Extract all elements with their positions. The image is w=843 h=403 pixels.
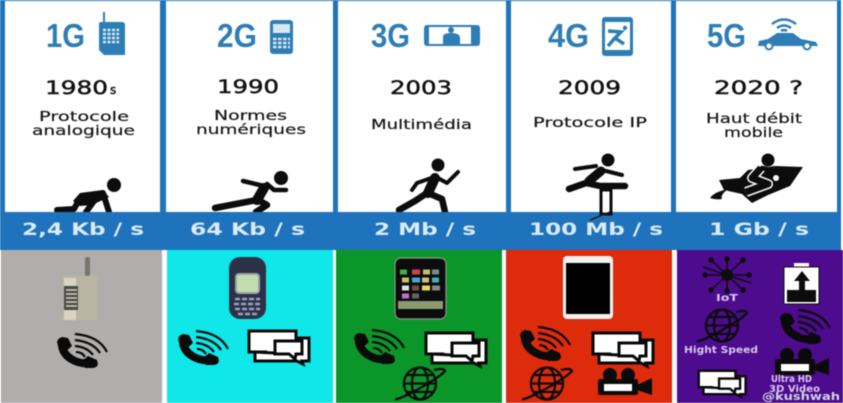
panel: 5G features bbox=[677, 250, 843, 403]
icon: voice call bbox=[354, 330, 404, 364]
panel: 2G features bbox=[167, 250, 333, 403]
text: Haut débit mobile: Haut débit bbox=[706, 111, 802, 127]
year: 2003: 2003 bbox=[390, 77, 452, 99]
text: Ultra HD 3D Video bbox=[769, 374, 820, 395]
heading: 5G: 5G bbox=[707, 17, 746, 54]
text: Hight Speed: Hight Speed bbox=[684, 345, 758, 356]
panel: 3G generation bbox=[338, 1, 506, 212]
panel: 4G generation bbox=[511, 1, 671, 212]
text: Multimédia: Multimédia bbox=[371, 117, 472, 133]
panel: 1G generation bbox=[5, 1, 160, 212]
icon: rider on rocket bbox=[710, 154, 803, 203]
speed band bbox=[0, 212, 841, 249]
text: Ultra HD 3D Video: Ultra HD bbox=[771, 374, 812, 385]
icon: 2G phone bbox=[270, 20, 293, 54]
speed: 1 Gb/s: 1 Gb / s bbox=[709, 220, 809, 239]
icon: text messages bbox=[593, 333, 653, 366]
text: Normes numériques: numériques bbox=[196, 122, 306, 138]
icon: connected car bbox=[758, 20, 818, 50]
icon: text messages bbox=[249, 331, 309, 364]
heading: 2G: 2G bbox=[217, 17, 257, 54]
icon: 1G handset bbox=[99, 12, 125, 55]
text: Haut débit mobile: mobile bbox=[724, 125, 783, 141]
text: Protocole analogique bbox=[32, 109, 135, 139]
panel: 1G features bbox=[1, 250, 162, 403]
icon: voice call bbox=[57, 334, 107, 368]
text: Protocole analogique: analogique bbox=[32, 123, 135, 139]
icon: IoT network bbox=[703, 257, 751, 293]
year: 1980s bbox=[45, 77, 116, 99]
panel: 4G features bbox=[506, 250, 672, 403]
icon: video camera bbox=[775, 348, 829, 375]
icon: video camera bbox=[598, 368, 652, 395]
icon: 4G smartphone bbox=[602, 17, 633, 56]
icon: text messages bbox=[426, 333, 486, 366]
icon: internet globe bbox=[522, 368, 572, 400]
text: Normes numériques bbox=[196, 108, 306, 138]
heading: 4G: 4G bbox=[548, 17, 589, 54]
icon: 3G landscape phone bbox=[424, 25, 480, 46]
device: Nokia phone bbox=[229, 257, 266, 319]
icon: sprinter bbox=[215, 171, 288, 212]
text: Normes numériques: Normes bbox=[214, 108, 287, 124]
text: Protocole IP: Protocole IP bbox=[533, 115, 647, 131]
device: smartphone bbox=[563, 256, 613, 319]
blue frame background bbox=[0, 0, 841, 250]
heading: 1G: 1G bbox=[46, 17, 85, 54]
year: 2009: 2009 bbox=[558, 77, 621, 99]
icon: runner bbox=[399, 158, 458, 212]
device: brick phone bbox=[60, 257, 97, 320]
panel: 2G generation bbox=[166, 1, 333, 212]
text: credit: @kushwah bbox=[762, 390, 840, 403]
icon: internet globe bbox=[697, 310, 747, 342]
text: IoT: IoT bbox=[716, 293, 738, 304]
speed: 2 Mb/s: 2 Mb / s bbox=[374, 220, 476, 239]
device: iPhone bbox=[395, 258, 446, 319]
icon: hurdler bbox=[569, 154, 625, 189]
heading: 3G: 3G bbox=[371, 17, 410, 54]
speed: 100 Mb/s: 100 Mb / s bbox=[529, 220, 663, 239]
panel: 5G generation bbox=[676, 1, 837, 212]
icon: voice call bbox=[178, 331, 228, 365]
icon: text messages bbox=[699, 371, 746, 397]
year: 2020 ?: 2020 ? bbox=[714, 77, 803, 99]
icon: voice call bbox=[780, 310, 830, 344]
icon: battery bbox=[784, 263, 819, 304]
speed: 64 Kb/s: 64 Kb / s bbox=[190, 220, 305, 239]
speed: 2,4 Kb/s: 2,4 Kb / s bbox=[22, 220, 144, 239]
icon: hurdle bbox=[590, 190, 611, 220]
icon: voice call bbox=[520, 327, 570, 361]
year: 1980s: s bbox=[110, 83, 116, 97]
panel: 3G features bbox=[336, 250, 502, 403]
text: Protocole analogique: Protocole bbox=[39, 109, 129, 125]
icon: crouching runner bbox=[57, 178, 121, 212]
year: 1990: 1990 bbox=[217, 76, 279, 98]
text: Ultra HD 3D Video: 3D Video bbox=[769, 384, 820, 395]
icon: internet globe bbox=[395, 368, 445, 400]
text: Haut débit mobile bbox=[706, 111, 802, 141]
year: 1980s: 1980 bbox=[45, 77, 108, 99]
